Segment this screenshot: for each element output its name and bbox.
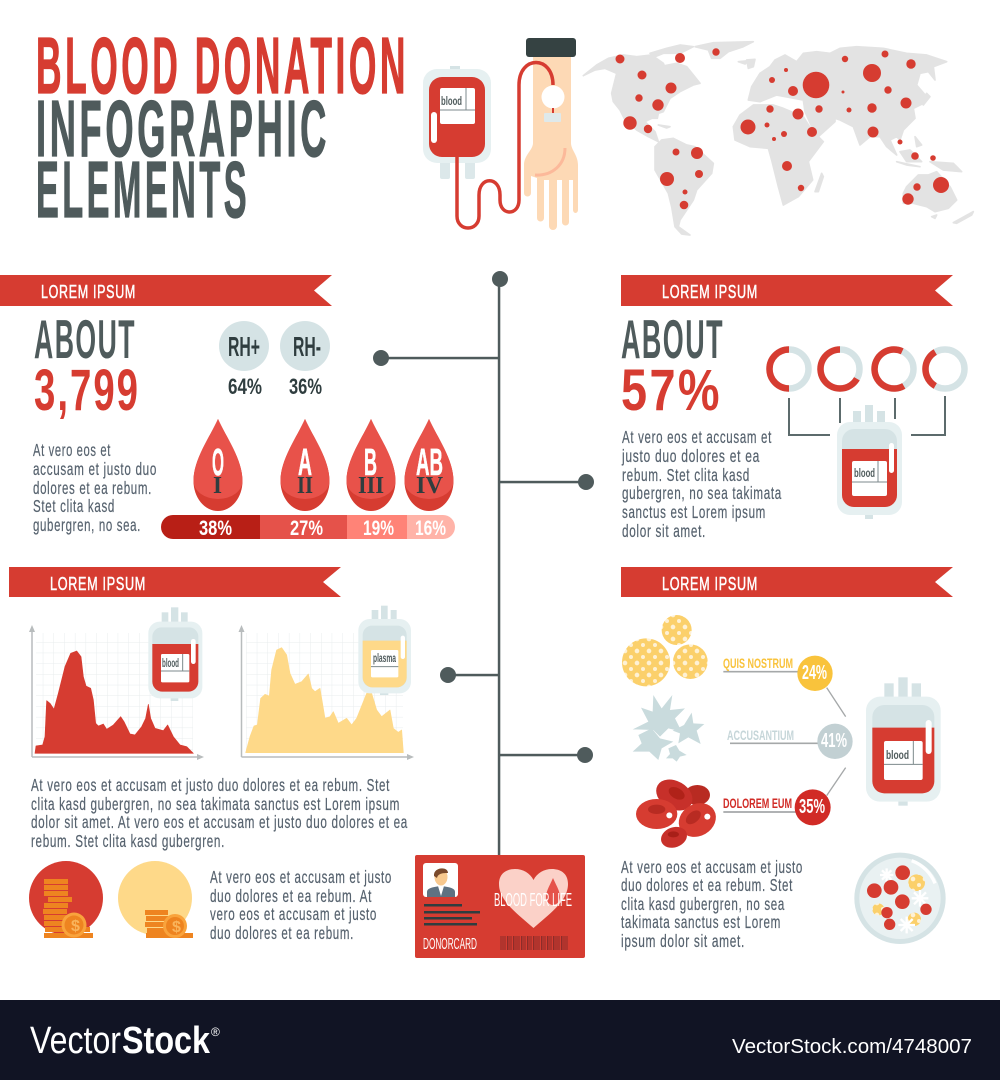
body text: sanctus est Lorem ipsum bbox=[622, 502, 766, 522]
blood drops: O bbox=[212, 442, 224, 484]
big number: 3,799 bbox=[34, 358, 140, 423]
body text bbox=[621, 427, 782, 541]
banner: LOREM IPSUM bbox=[662, 282, 758, 302]
blood drops: III bbox=[358, 473, 384, 499]
body text: duo dolores et ea rebum. bbox=[210, 923, 354, 943]
label: accusantium bbox=[727, 727, 847, 752]
text: BLOOD DONATION bbox=[36, 21, 409, 110]
body text: At vero eos et accusam et justo bbox=[621, 857, 803, 877]
icon: blood bag with arm bbox=[423, 38, 578, 230]
photo bbox=[423, 863, 458, 897]
banner: LOREM IPSUM bbox=[50, 574, 146, 594]
blood drops bbox=[194, 419, 454, 511]
label: quis nostrum: QUIS NOSTRUM bbox=[723, 655, 793, 671]
panel: blood type stats bbox=[0, 275, 455, 540]
blood drops: B bbox=[364, 442, 377, 484]
label: dolorem eum: 35% bbox=[799, 796, 825, 818]
panel: about 57% bbox=[621, 275, 964, 541]
body text: At vero eos et accusam et bbox=[622, 427, 772, 447]
body text: accusam et justo duo bbox=[33, 459, 157, 479]
icon: large blood bag bbox=[866, 677, 941, 806]
donor card: BLOOD FOR LIFE bbox=[494, 890, 572, 910]
body text: rebum. Stet clita kasd gubergren. bbox=[31, 831, 225, 851]
red dots bbox=[616, 48, 949, 209]
label: dolorem eum bbox=[723, 795, 825, 818]
heart bbox=[499, 869, 568, 928]
blood drops: AB bbox=[416, 442, 443, 484]
land masses west bbox=[583, 42, 753, 235]
body text bbox=[31, 775, 408, 851]
footer watermark bar: ® bbox=[211, 1025, 220, 1039]
title bbox=[36, 21, 409, 234]
land masses east bbox=[733, 47, 973, 223]
percentage bar bbox=[161, 515, 455, 540]
rhesus circles: RH- bbox=[293, 331, 321, 362]
blood drops: A bbox=[298, 442, 312, 484]
body text bbox=[33, 440, 157, 535]
rhesus circles: 36% bbox=[289, 374, 322, 399]
big number: ABOUT bbox=[34, 308, 136, 370]
panel: charts bbox=[9, 567, 414, 943]
body text: dolor sit amet. bbox=[622, 521, 706, 541]
donor card: DONORCARD bbox=[423, 936, 477, 953]
body text bbox=[621, 857, 803, 951]
percentage bar: 27% bbox=[290, 517, 323, 540]
blood drops: IV bbox=[416, 473, 444, 499]
body text: takimata sanctus est Lorem bbox=[621, 912, 781, 932]
icon: yellow circle with coins: $ bbox=[172, 919, 181, 936]
icon: yellow cells bbox=[622, 615, 708, 686]
rhesus circles: 64% bbox=[228, 374, 262, 399]
body text: gubergren, no sea takimata bbox=[622, 483, 782, 503]
banner: LOREM IPSUM bbox=[41, 282, 136, 302]
label: quis nostrum: 24% bbox=[802, 662, 827, 684]
icon: blood bag with arm: blood bbox=[441, 94, 462, 108]
banner bbox=[0, 275, 332, 306]
icon: gray cells bbox=[633, 695, 704, 762]
body text: vero eos et accusam et justo bbox=[210, 904, 377, 924]
banner bbox=[621, 275, 953, 306]
body text: At vero eos et bbox=[33, 440, 111, 460]
big number bbox=[621, 308, 724, 423]
body text bbox=[210, 867, 392, 943]
connector lines bbox=[723, 672, 846, 812]
chart: blood: blood bbox=[162, 656, 179, 670]
rhesus circles bbox=[219, 321, 330, 399]
label: accusantium: ACCUSANTIUM bbox=[727, 727, 794, 743]
body text: dolor sit amet. At vero eos et accusam et justo duo dolores et ea bbox=[31, 812, 408, 832]
drop in heart bbox=[546, 878, 560, 905]
body text: At vero eos et accusam et justo duo dolores et ea rebum. Stet bbox=[31, 775, 390, 795]
label: quis nostrum bbox=[723, 655, 827, 684]
icon: red cells bbox=[636, 773, 722, 851]
central timeline bbox=[373, 271, 594, 859]
info lines bbox=[424, 904, 480, 926]
barcode bbox=[501, 936, 567, 950]
label: accusantium: 41% bbox=[821, 730, 847, 752]
blood drops: I bbox=[213, 473, 222, 499]
banner bbox=[621, 567, 953, 597]
body text: clita kasd gubergren, no sea takimata sanctus est Lorem ipsum bbox=[31, 794, 400, 814]
footer watermark bar: Vector bbox=[30, 1020, 121, 1062]
big number bbox=[34, 308, 140, 423]
chart: plasma bbox=[238, 606, 414, 760]
icon: petri dish bbox=[854, 853, 946, 944]
title: ELEMENTS bbox=[36, 145, 250, 234]
chart: blood bbox=[29, 607, 204, 760]
percentage bar: 38% bbox=[199, 517, 232, 540]
percent circles bbox=[795, 656, 853, 825]
body text: justo duo dolores et ea bbox=[621, 446, 760, 466]
donor card bbox=[415, 855, 585, 958]
panel: blood components bbox=[621, 567, 953, 951]
chart: plasma: plasma bbox=[373, 651, 396, 665]
body text: duo dolores et ea rebum. At bbox=[210, 886, 372, 906]
bag label: blood bbox=[886, 748, 909, 762]
body text: Stet clita kasd bbox=[33, 496, 115, 516]
body text: ipsum dolor sit amet. bbox=[621, 931, 745, 951]
icon: red circle with coins bbox=[29, 861, 103, 938]
rhesus circles: RH+ bbox=[228, 331, 260, 362]
body text: At vero eos et accusam et justo bbox=[210, 867, 392, 887]
blood drops: II bbox=[297, 473, 313, 499]
icon: blood bag bbox=[837, 405, 902, 519]
body text: clita kasd gubergren, no sea bbox=[621, 894, 785, 914]
body text: gubergren, no sea. bbox=[33, 515, 141, 535]
body text: rebum. Stet clita kasd bbox=[622, 465, 750, 485]
footer watermark bar bbox=[0, 1000, 1000, 1080]
footer watermark bar: Stock bbox=[122, 1020, 211, 1062]
big number: 57% bbox=[621, 358, 722, 423]
donut rings bbox=[770, 350, 964, 389]
icon: blood bag: blood bbox=[854, 466, 875, 480]
title: INFOGRAPHIC bbox=[36, 84, 330, 173]
connector lines bbox=[789, 396, 945, 435]
label: dolorem eum: DOLOREM EUM bbox=[723, 795, 792, 811]
icon: red circle with coins: $ bbox=[71, 918, 80, 935]
banner: LOREM IPSUM bbox=[662, 574, 758, 594]
banner bbox=[9, 567, 341, 597]
body text: duo dolores et ea rebum. Stet bbox=[621, 875, 793, 895]
panel: about 57%: ABOUT bbox=[621, 308, 724, 370]
percentage bar: 16% bbox=[415, 517, 446, 540]
footer watermark bar: VectorStock.com/4748007 bbox=[732, 1036, 972, 1058]
body text: dolores et ea rebum. bbox=[33, 478, 152, 498]
world map bbox=[583, 42, 973, 235]
percentage bar: 19% bbox=[363, 517, 394, 540]
icon: yellow circle with coins bbox=[118, 861, 193, 938]
